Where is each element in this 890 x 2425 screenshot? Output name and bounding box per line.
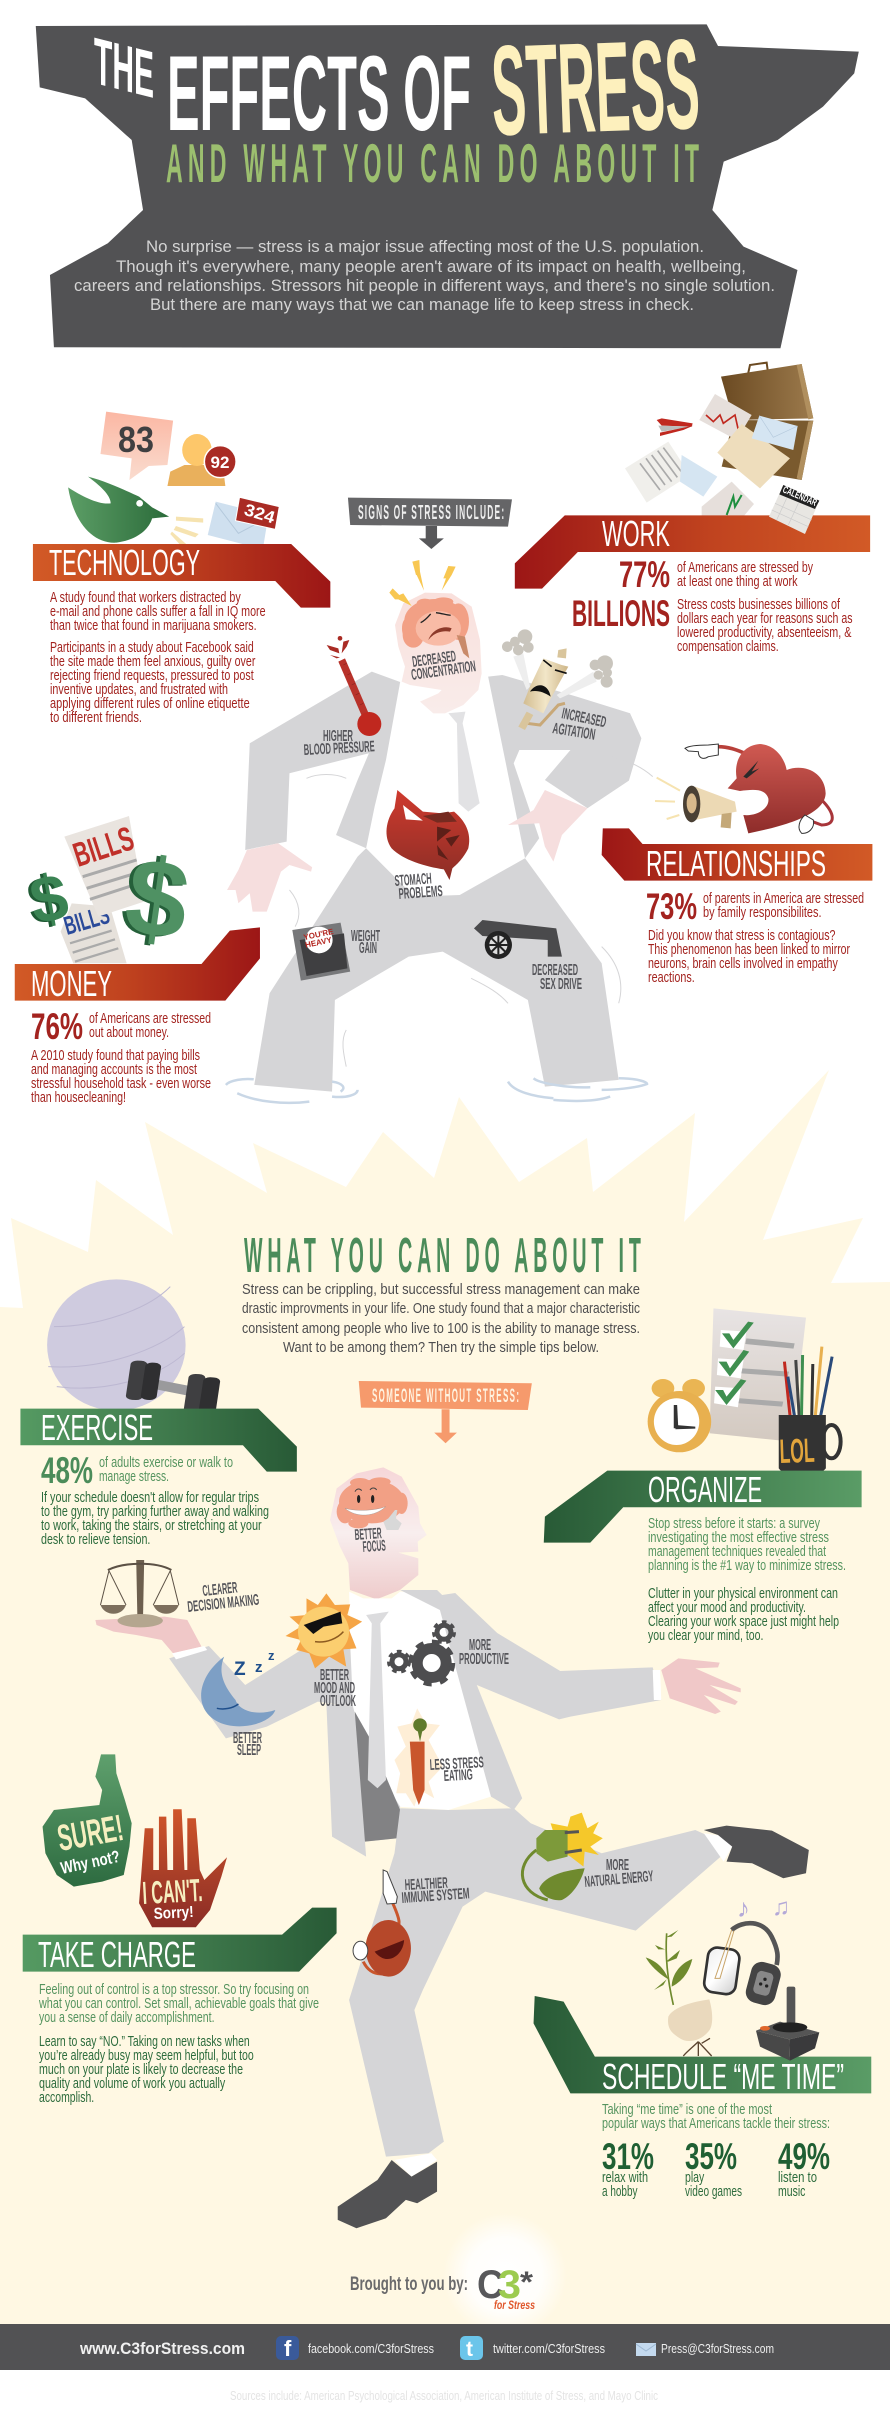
cream starburst background: [0, 1070, 890, 2324]
stressed man figure: [226, 560, 653, 1103]
stat: billions: BILLIONS: [572, 593, 670, 634]
icon: speech bubble 83: [100, 412, 173, 480]
title anvil panel: THE: [94, 24, 154, 113]
banner: work: [515, 513, 870, 589]
text: exercise body: If your schedule doesn't allow for regular trips: [41, 1489, 259, 1506]
banner: schedule me time: [534, 1996, 871, 2097]
text: me time intro: [602, 2101, 830, 2132]
title anvil panel: [36, 13, 859, 348]
label: more natural energy: MORE: [606, 1857, 629, 1874]
relaxed man figure: PRODUCTIVE: [459, 1651, 509, 1668]
stat: 77%: at least one thing at work: [677, 573, 798, 590]
stat: 49%: [778, 2136, 830, 2200]
text: exercise body: [41, 1489, 269, 1548]
label: more productive: MORE: [469, 1637, 491, 1654]
label: stomach problems: STOMACH: [394, 870, 432, 890]
icon: calendar: CALENDAR: [781, 485, 819, 509]
stat: 76%: 76%: [31, 1006, 83, 1047]
text: organize body: investigating the most effective stress: [648, 1529, 829, 1546]
icon: moon and zzz: Z: [234, 1659, 246, 1680]
label: healthier immune system: HEALTHIER: [404, 1875, 448, 1894]
label: stomach problems: [394, 870, 443, 903]
label: better focus: BETTER: [354, 1525, 382, 1544]
icon: envelope with badge 324: 324: [242, 500, 278, 528]
label: clearer decision making: DECISION MAKING: [187, 1592, 260, 1616]
intro text: Though it's everywhere, many people aren't aware of its impact on health, wellbeing,: [116, 257, 746, 276]
label: higher blood pressure: [303, 728, 375, 759]
someone without stress callout: [359, 1381, 532, 1443]
stat: 77%: [619, 554, 813, 595]
stat: 73%: 73%: [646, 886, 697, 927]
banner: take charge: [23, 1908, 337, 1975]
icon: sun with sunglasses: [286, 1593, 362, 1668]
text: organize body: Stop stress before it starts: a survey: [648, 1515, 820, 1532]
icon: sure thumbs up: SURE!: [54, 1807, 126, 1859]
stat: 73%: [646, 886, 864, 927]
sources note: Sources include: American Psychological Association, American Institute of Stress, and Mayo Clinic: [230, 2388, 658, 2403]
icon: bills and dollar signs: $: [25, 859, 74, 938]
relaxed man figure: NATURAL ENERGY: [584, 1868, 654, 1891]
icon: email envelope: [636, 2343, 656, 2356]
icon: twitter: [460, 2336, 483, 2361]
icon: stomach: [387, 790, 469, 880]
text: technology body: Participants in a study about Facebook said: [50, 639, 254, 656]
icon: bills and dollar signs: $: [114, 835, 192, 965]
text: money body: than housecleaning!: [31, 1089, 126, 1106]
text: technology body: [50, 589, 266, 726]
signs of stress callout: SIGNS OF STRESS INCLUDE:: [358, 502, 504, 524]
label: better mood and outlook: BETTER: [320, 1667, 349, 1684]
text: technology body: rejecting friend requests, pressured to post: [50, 667, 254, 684]
icon: bathroom scale: HEAVY: [304, 935, 333, 950]
intro text: No surprise — stress is a major issue affecting most of the U.S. population.: [146, 237, 704, 256]
text: technology body: A study found that workers distracted by: [50, 589, 241, 606]
banner: exercise: [20, 1407, 297, 1472]
text: technology body: to different friends.: [50, 709, 142, 726]
stat: 31%: [602, 2136, 654, 2200]
label: weight gain: GAIN: [359, 940, 377, 957]
icon: healthy immune cell: [353, 1870, 411, 1977]
footer bar: [0, 2324, 890, 2370]
icon: bills and dollar signs: [22, 816, 196, 965]
icon: joystick: [756, 1987, 819, 2061]
text: section intro: Stress can be crippling, but successful stress management can make: [242, 1281, 640, 1298]
banner: work: WORK: [602, 513, 670, 554]
text: relationships body: [648, 927, 850, 986]
label: better sleep: [233, 1730, 262, 1759]
stat: 48%: [41, 1450, 233, 1491]
sponsor: brought to you by C3: for Stress: [494, 2298, 535, 2312]
panel: work: [515, 363, 870, 655]
banner: take charge: TAKE CHARGE: [38, 1934, 196, 1975]
text: money body: stressful household task - even worse: [31, 1075, 211, 1092]
label: stomach problems: PROBLEMS: [398, 883, 443, 903]
icon: exercise ball and dumbbell: [47, 1279, 221, 1415]
icon: twitter: t: [466, 2338, 473, 2361]
relaxed man figure: OUTLOOK: [320, 1693, 356, 1710]
text: exercise body: desk to relieve tension.: [41, 1531, 150, 1548]
footer: facebook: facebook.com/C3forStress: [308, 2341, 434, 2356]
text: take charge body: you a sense of daily accomplishment.: [39, 2009, 214, 2026]
text: organize body: you clear your mind, too.: [648, 1627, 763, 1644]
label: increased agitation: AGITATION: [551, 720, 597, 744]
banner: organize: [544, 1469, 862, 1543]
icon: briefcase and papers: [625, 363, 813, 517]
text: take charge body: [38, 1981, 319, 2106]
heading: what you can do about it: WHAT YOU CAN DO ABOUT IT: [244, 1227, 641, 1283]
icon: plant and headphones: ♪: [737, 1893, 750, 1923]
label: increased agitation: [551, 705, 608, 744]
text: section intro: consistent among people who live to 100 is the ability to manage stress.: [242, 1320, 640, 1337]
icon: speech bubble 83: 83: [118, 419, 154, 460]
stat: 76%: of Americans are stressed: [89, 1010, 211, 1027]
icon: facebook: [276, 2336, 299, 2361]
stat: 77%: 77%: [619, 554, 670, 595]
footer: twitter: twitter.com/C3forStress: [493, 2341, 605, 2356]
text: section intro: [242, 1281, 640, 1356]
stat: 35%: [685, 2136, 742, 2200]
label: decreased sex drive: DECREASED: [532, 962, 578, 979]
icon: person with badge 92: 92: [211, 453, 229, 472]
label: increased agitation: INCREASED: [560, 705, 608, 731]
panel: relationships: [602, 744, 872, 986]
banner: exercise: EXERCISE: [41, 1407, 153, 1448]
panel: organize: [544, 1308, 862, 1644]
intro text: careers and relationships. Stressors hit people in different ways, and there's no single solution.: [74, 276, 775, 295]
stat: 48%: of adults exercise or walk to: [99, 1454, 233, 1471]
stressed man figure: WEIGHT: [351, 928, 380, 945]
text: organize body: [648, 1515, 846, 1644]
intro text: But there are many ways that we can manage life to keep stress in check.: [150, 295, 694, 314]
stat: 35%: 35%: [685, 2136, 737, 2177]
relaxed man figure: MOOD AND: [314, 1680, 355, 1697]
text: technology body: applying different rules of online etiquette: [50, 695, 250, 712]
stressed man figure: CONCENTRATION: [410, 658, 477, 684]
icon: moon and zzz: z: [268, 1648, 275, 1663]
icon: plug and leaf: [522, 1813, 603, 1900]
text: technology body: e-mail and phone calls suffer a fall in IQ more: [50, 603, 266, 620]
sponsor: brought to you by C3: *: [520, 2266, 533, 2299]
label: clearer decision making: CLEARER: [202, 1579, 238, 1600]
stat: billions: compensation claims.: [677, 638, 779, 655]
text: take charge body: Feeling out of control is a top stressor. So try focusing on: [39, 1981, 309, 1998]
text: money body: A 2010 study found that paying bills: [31, 1047, 200, 1064]
icon: bills and dollar signs: $: [118, 834, 196, 964]
icon: plant and headphones: [646, 1893, 790, 2056]
text: take charge body: much on your plate is likely to decrease the: [39, 2061, 243, 2078]
icon: angry heart with megaphone: [655, 744, 832, 833]
icon: balance scale: [100, 1560, 179, 1627]
label: less stress eating: LESS STRESS: [429, 1754, 484, 1774]
relaxed man figure: FOCUS: [362, 1537, 386, 1556]
label: decreased concentration: [410, 648, 477, 684]
panel: technology: [33, 412, 330, 726]
stat: 48%: manage stress.: [99, 1468, 169, 1485]
sponsor: brought to you by C3: Brought to you by:: [350, 2274, 468, 2295]
icon: plant and headphones: ♫: [772, 1894, 790, 1921]
panel: take charge: [23, 1754, 337, 2106]
stat: 49%: listen to: [778, 2169, 817, 2186]
icon: thermometer: [327, 636, 381, 736]
subtitle: AND WHAT YOU CAN DO ABOUT IT: [166, 132, 699, 194]
label: clearer decision making: [187, 1579, 260, 1616]
stat: 31%: 31%: [602, 2136, 654, 2177]
relaxed man figure: BETTER: [233, 1730, 262, 1747]
label: higher blood pressure: HIGHER: [323, 728, 353, 745]
label: better mood and outlook: [314, 1667, 356, 1710]
text: organize body: affect your mood and productivity.: [648, 1599, 806, 1616]
icon: calendar: [769, 485, 819, 534]
panel: exercise: [20, 1279, 297, 1548]
icon: cannon: [474, 920, 562, 959]
stat: 73%: by family responsibilites.: [703, 904, 822, 921]
text: money body: [31, 1047, 211, 1106]
icon: stop hand: [139, 1809, 227, 1927]
label: decreased sex drive: [532, 962, 582, 993]
text: take charge body: you’re already busy may seem helpful, but too: [39, 2047, 254, 2064]
panel: money: [15, 816, 260, 1106]
label: more natural energy: [584, 1857, 654, 1891]
icon: checklist, clock and mug: [648, 1308, 841, 1477]
footer: website: www.C3forStress.com: [79, 2339, 245, 2358]
icon: decreased concentration brain: [389, 560, 482, 713]
label: decreased concentration: DECREASED: [411, 648, 457, 671]
stat: 49%: 49%: [778, 2136, 830, 2177]
label: less stress eating: [429, 1754, 484, 1785]
icon: green bird: [68, 477, 203, 544]
icon: stop hand: I CAN'T.: [141, 1872, 203, 1911]
banner: relationships: [602, 828, 872, 884]
icon: gears: [388, 1622, 454, 1684]
icon: bathroom scale: YOU'RE: [303, 927, 335, 942]
icon: carrot: [394, 1708, 443, 1807]
text: money body: and managing accounts is the most: [31, 1061, 198, 1078]
icon: steam whistle: [502, 629, 613, 730]
signs of stress callout: [348, 498, 512, 549]
banner: money: [15, 927, 260, 1004]
label: weight gain: [351, 928, 380, 957]
stat: 31%: a hobby: [602, 2183, 638, 2200]
text: take charge body: what you can control. Set small, achievable goals that give: [38, 1995, 319, 2012]
stat: 35%: play: [685, 2169, 705, 2186]
text: take charge body: Learn to say “NO.” Taking on new tasks when: [39, 2033, 250, 2050]
icon: bills and dollar signs: BILLS: [60, 899, 113, 941]
stat: 35%: video games: [685, 2183, 742, 2200]
footer: email: Press@C3forStress.com: [661, 2341, 774, 2356]
text: me time intro: Taking “me time” is one of the most: [602, 2101, 773, 2118]
title anvil panel: EFFECTS OF: [167, 33, 471, 153]
label: healthier immune system: [401, 1875, 470, 1907]
stat: 48%: 48%: [41, 1450, 93, 1491]
someone without stress callout: SOMEONE WITHOUT STRESS:: [372, 1386, 519, 1407]
relaxed man figure: [95, 1467, 809, 2228]
label: more productive: [459, 1637, 509, 1668]
text: technology body: than twice that found in marijuana smokers.: [50, 617, 257, 634]
text: exercise body: to work, taking the stairs, or stretching at your: [41, 1517, 262, 1534]
icon: sure thumbs up: [43, 1754, 132, 1887]
stat: 49%: music: [778, 2183, 806, 2200]
stat: 76%: out about money.: [89, 1024, 169, 1041]
icon: moon and zzz: [201, 1648, 275, 1726]
text: section intro: drastic improvments in your life. One study found that a major characteristic: [242, 1300, 640, 1317]
banner: technology: [33, 542, 330, 608]
intro text: [74, 237, 775, 314]
panel: schedule me time: [534, 1893, 871, 2200]
icon: stop hand: Sorry!: [153, 1904, 194, 1923]
icon: envelope with badge 324: [208, 497, 279, 549]
sponsor: brought to you by C3: [350, 2213, 567, 2337]
icon: sure thumbs up: Why not?: [59, 1847, 122, 1878]
stat: 76%: [31, 1006, 211, 1047]
icon: person with badge 92: [167, 434, 236, 486]
icon: facebook: f: [284, 2336, 292, 2361]
icon: bills and dollar signs: BILLS: [69, 820, 138, 875]
text: take charge body: quality and volume of work you actually: [39, 2075, 226, 2092]
text: technology body: inventive updates, and frustrated with: [50, 681, 228, 698]
banner: organize: ORGANIZE: [648, 1469, 762, 1510]
label: better focus: [354, 1525, 386, 1556]
icon: moon and zzz: z: [255, 1659, 262, 1676]
stat: 31%: relax with: [602, 2169, 648, 2186]
stat: 77%: of Americans are stressed by: [677, 559, 813, 576]
icon: checklist, clock and mug: LOL: [779, 1432, 815, 1471]
text: exercise body: to the gym, try parking further away and walking: [41, 1503, 269, 1520]
stressed man figure: BLOOD PRESSURE: [303, 738, 375, 759]
text: technology body: the site made them feel anxious, guilty over: [50, 653, 255, 670]
relaxed man figure: SLEEP: [237, 1742, 261, 1759]
label: healthier immune system: IMMUNE SYSTEM: [401, 1885, 470, 1907]
text: section intro: Want to be among them? Then try the simple tips below.: [283, 1339, 599, 1356]
label: decreased sex drive: SEX DRIVE: [540, 976, 582, 993]
sponsor: brought to you by C3: C: [477, 2263, 504, 2307]
sponsor: brought to you by C3: 3: [498, 2263, 521, 2307]
label: less stress eating: EATING: [443, 1767, 473, 1785]
stat: billions: [572, 593, 852, 655]
text: relationships body: reactions.: [648, 969, 695, 986]
text: take charge body: accomplish.: [39, 2089, 94, 2106]
icon: bathroom scale: [292, 923, 350, 981]
banner: technology: TECHNOLOGY: [49, 542, 200, 583]
banner: money: MONEY: [31, 963, 112, 1004]
icon: bills and dollar signs: $: [22, 860, 71, 939]
icon: happy brain: [337, 1477, 408, 1530]
